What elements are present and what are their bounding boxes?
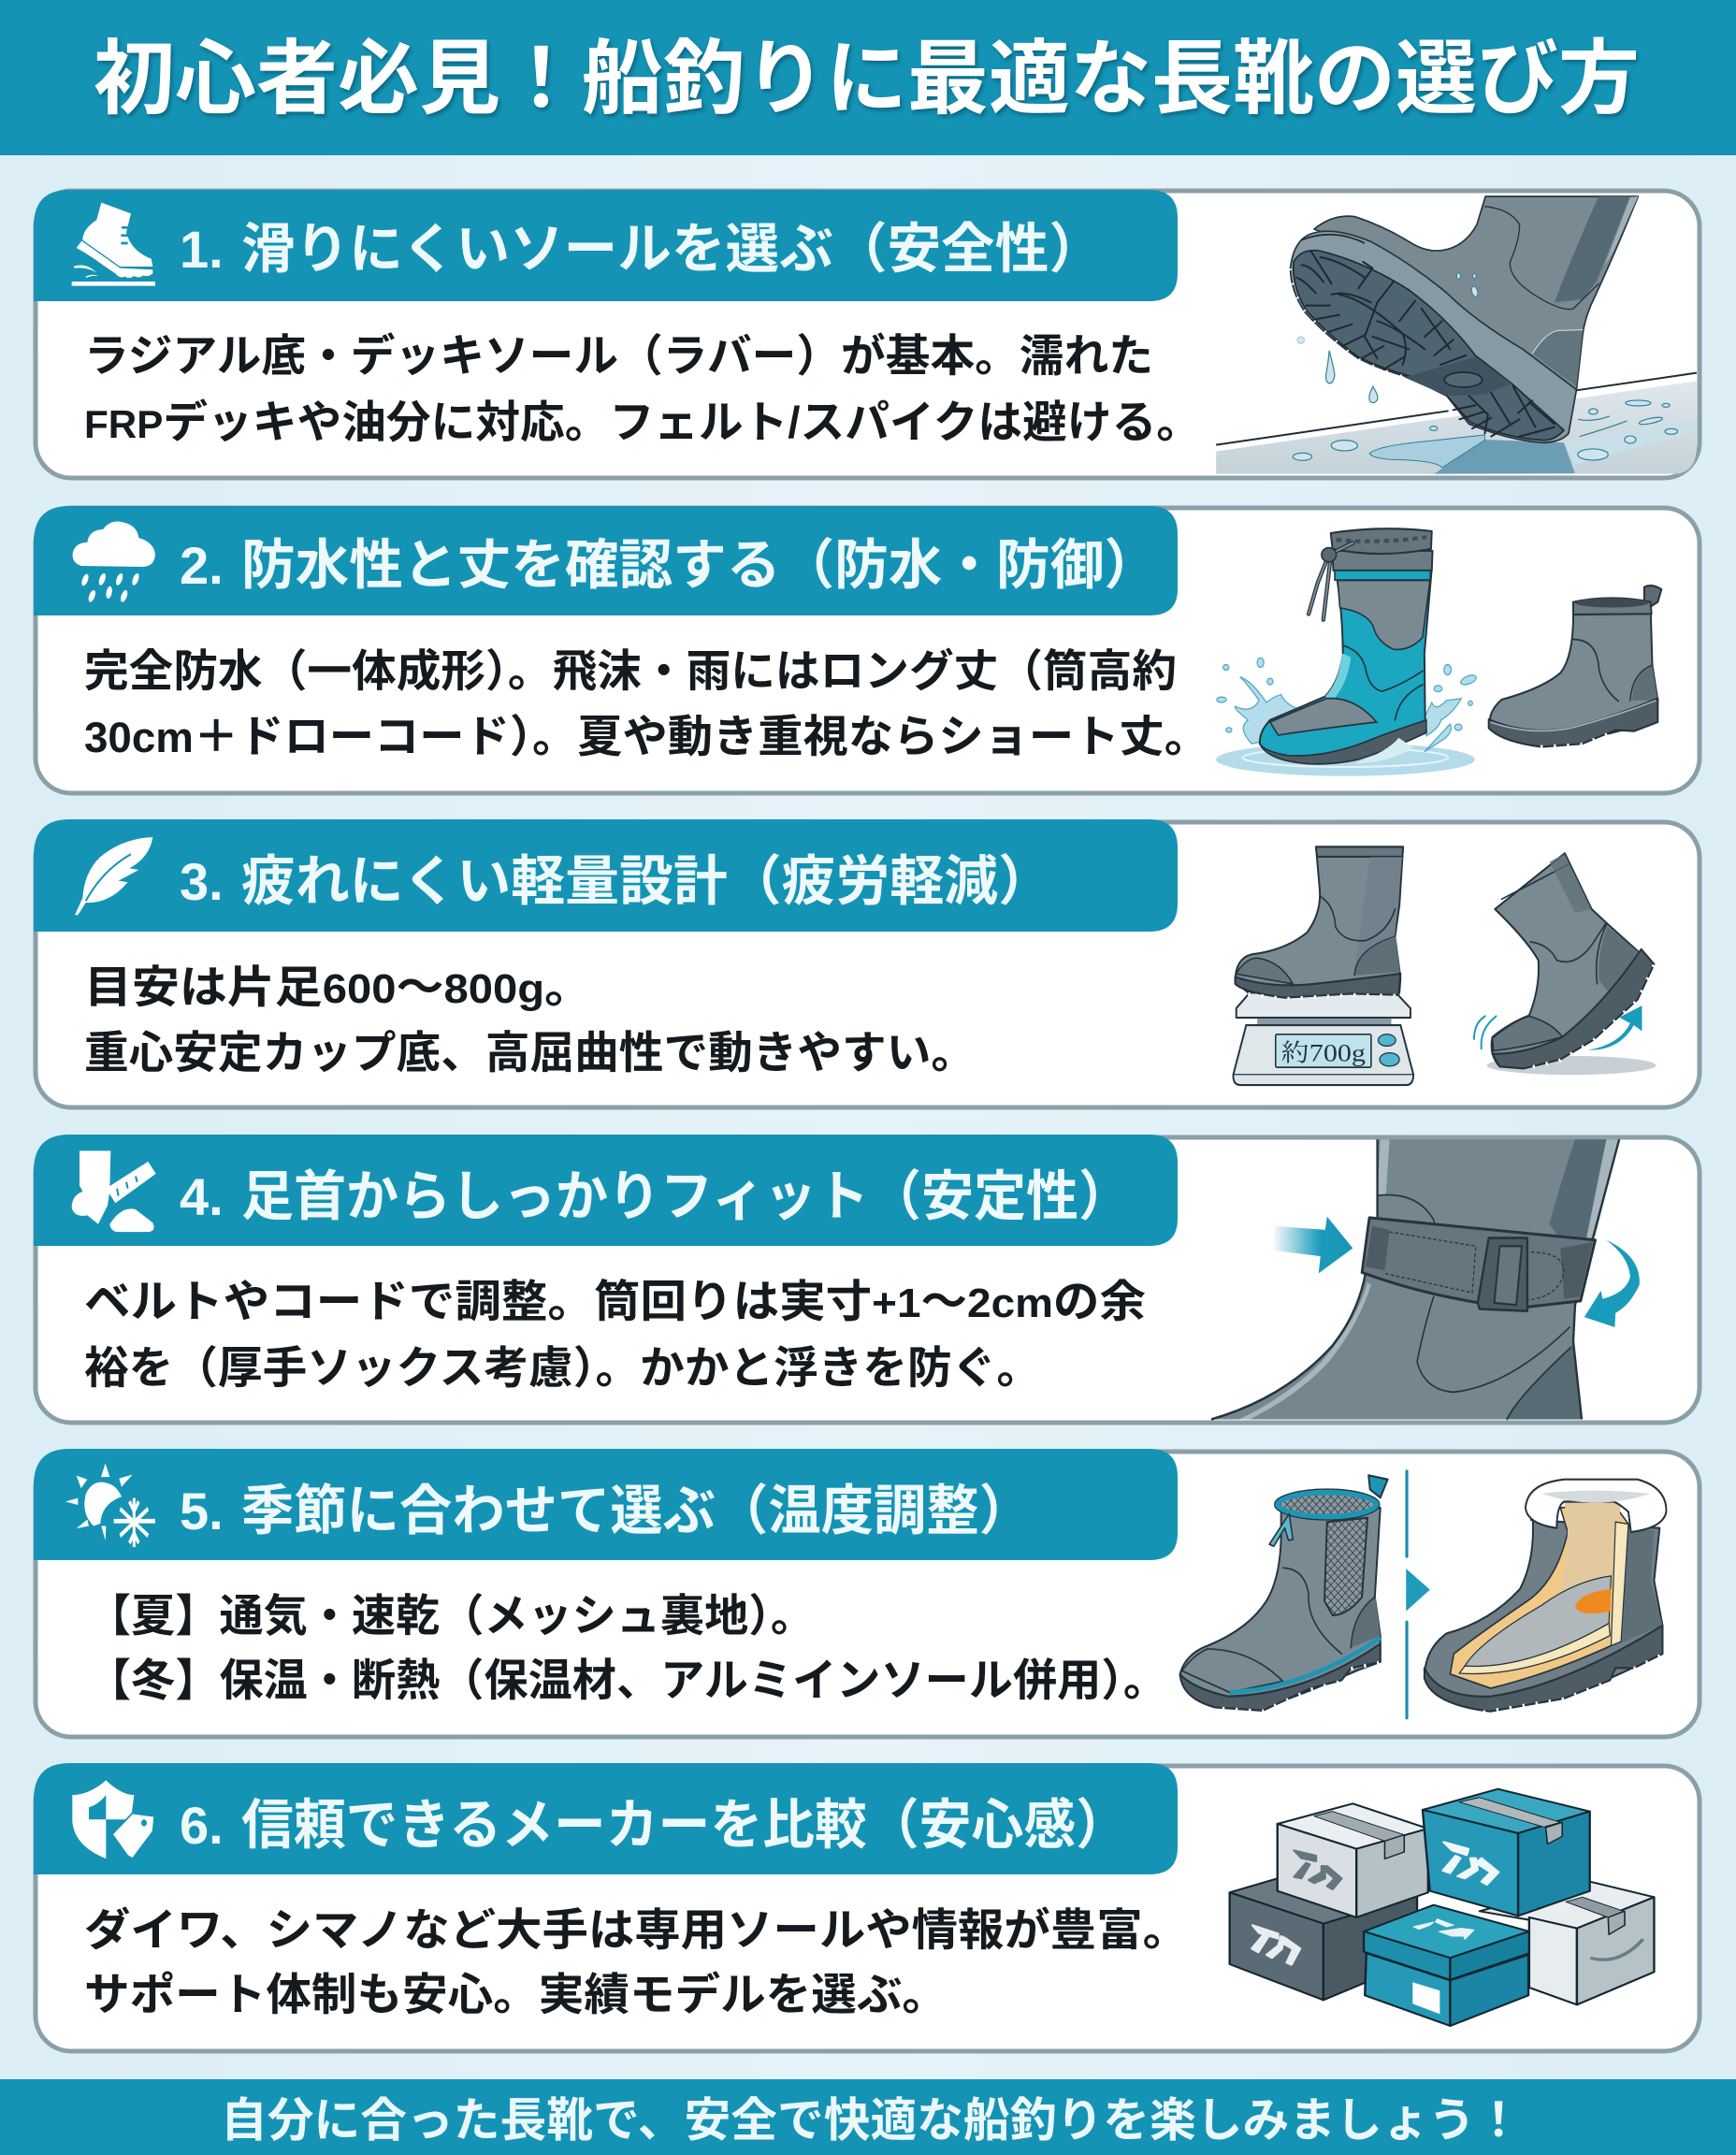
body text (84, 332, 1201, 448)
icon: sun and snowflake (65, 1464, 155, 1547)
icon: rain cloud (73, 522, 155, 603)
icon: slipping boot (72, 203, 155, 286)
heading text: 季節に合わせて選ぶ（温度調整） (241, 1481, 1032, 1541)
illustration: stacked brand boxes (1230, 1789, 1654, 2026)
footer banner (0, 2079, 1736, 2155)
card frame (36, 508, 1700, 793)
heading text: 信頼できるメーカーを比較（安心感） (241, 1795, 1128, 1856)
body text: ラジアル底・デッキソール（ラバー）が基本。濡れた (84, 332, 1153, 382)
body text: 【冬】保温・断熱（保温材、アルミインソール併用）。 (87, 1656, 1167, 1706)
box: dark (1230, 1878, 1417, 2000)
footer text: 自分に合った長靴で、安全で快適な船釣りを楽しみましょう！ (221, 2094, 1522, 2147)
body text: ベルトやコードで調整。筒回りは実寸 +1〜2cmの余 (84, 1278, 1146, 1327)
title text: 初心者必見！船釣りに最適な長靴の選び方 (94, 34, 1640, 124)
body text: FRPデッキや油分に対応。フェルト/スパイクは避ける。 (84, 398, 1201, 448)
card frame (36, 1137, 1700, 1423)
panel: 1 sole (34, 190, 1700, 478)
heading text: 足首からしっかりフィット（安定性） (241, 1166, 1131, 1227)
illustration: flexing boot (1474, 853, 1656, 1075)
heading text: 6. (180, 1796, 224, 1855)
panel: 5 season (34, 1449, 1700, 1737)
scale readout: 約700g (1281, 1040, 1366, 1067)
heading tab (34, 1135, 1178, 1246)
body text: 【夏】通気・速乾（メッシュ裏地）。 (87, 1592, 815, 1642)
heading text: 2. (180, 536, 224, 595)
body text: 完全防水（一体成形）。飛沫・雨にはロング丈（筒高約 (84, 647, 1177, 697)
icon: ankle and ruler (72, 1150, 156, 1232)
body text: 目安は片足 600〜800g。 (84, 963, 592, 1013)
box: teal lidded (1364, 1905, 1529, 2026)
illustration: summer mesh boot (1180, 1475, 1388, 1712)
body text (84, 963, 976, 1078)
card frame (36, 822, 1700, 1107)
body text (87, 1592, 1167, 1706)
box: white right (1480, 1882, 1654, 2004)
icon: feather (75, 837, 152, 915)
illustration: short boot (1489, 586, 1661, 747)
panel: 6 makers (34, 1763, 1700, 2051)
icon: shield and tag (72, 1780, 154, 1859)
heading tab (34, 819, 1178, 932)
card frame (36, 1766, 1700, 2051)
heading text: 4. (180, 1167, 224, 1226)
body text (84, 647, 1209, 762)
card frame (36, 191, 1700, 478)
heading text: 疲れにくい軽量設計（疲労軽減） (241, 851, 1052, 912)
heading text: 防水性と丈を確認する（防水・防御） (241, 535, 1158, 596)
illustration: ankle strap close-up (1211, 1139, 1640, 1419)
heading tab (34, 190, 1178, 301)
illustration: boot sole on wet deck (1216, 196, 1697, 474)
body text: ダイワ、シマノなど大手は専用ソールや情報が豊富。 (84, 1906, 1189, 1956)
box: light gray (1278, 1803, 1428, 1917)
box: teal top (1423, 1789, 1590, 1916)
panel: 4 fit (34, 1135, 1700, 1423)
title banner (0, 0, 1736, 155)
arrow: wrap around (1584, 1240, 1640, 1327)
arrow: tightening from left (1272, 1217, 1353, 1273)
heading text: 5. (180, 1482, 224, 1540)
illustration: long boot with splash (1216, 528, 1478, 776)
illustration: winter insulated boot cutaway (1425, 1480, 1666, 1713)
body text: 30cm＋ドローコード）。夏や動き重視ならショート丈。 (84, 713, 1209, 762)
heading tab (34, 506, 1178, 615)
divider with arrow (1406, 1471, 1430, 1718)
heading tab (34, 1449, 1178, 1560)
body text: 重心安定カップ底、高屈曲性で動きやすい。 (84, 1029, 976, 1078)
illustration: boot on scale showing weight (1234, 846, 1413, 1085)
body text (84, 1906, 1189, 2020)
heading text: 1. (180, 220, 224, 279)
card frame (36, 1452, 1700, 1737)
heading text: 3. (180, 852, 224, 911)
panel: 3 lightweight (34, 819, 1700, 1107)
heading text: 滑りにくいソールを選ぶ（安全性） (241, 219, 1103, 280)
body text: 裕を（厚手ソックス考慮）。かかと浮きを防ぐ。 (84, 1344, 1041, 1394)
body text (84, 1278, 1146, 1394)
panel: 2 waterproof (34, 506, 1700, 793)
body text: サポート体制も安心。実績モデルを選ぶ。 (84, 1971, 948, 2020)
heading tab (34, 1763, 1178, 1874)
